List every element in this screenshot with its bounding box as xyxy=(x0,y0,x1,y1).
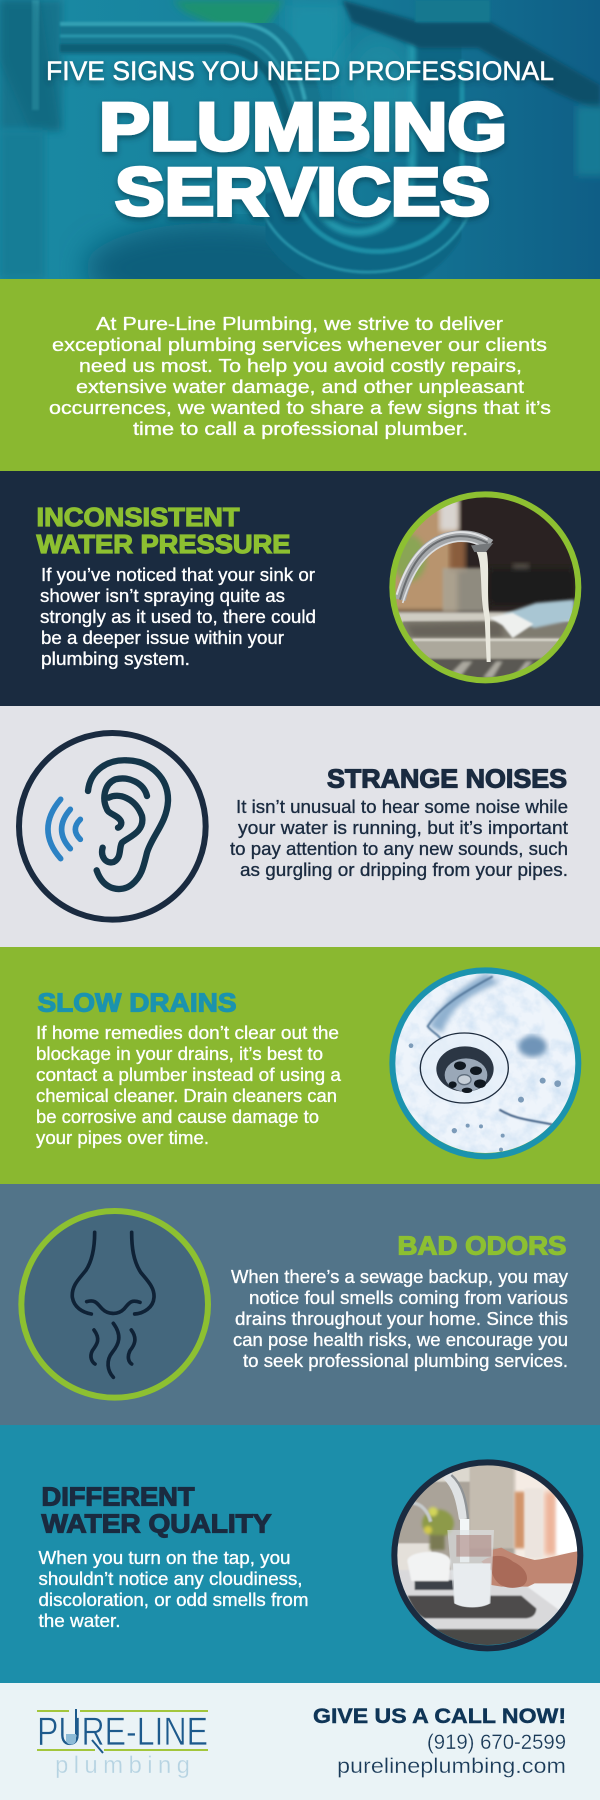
icon: ear with sound waves xyxy=(19,733,206,920)
hero background photo: pipes xyxy=(0,0,600,279)
heading: WATER QUALITY xyxy=(42,1508,272,1538)
photo: sink drain xyxy=(386,963,586,1163)
photo: filling a glass xyxy=(388,1455,588,1655)
hero title: PLUMBING xyxy=(99,89,507,165)
heading: INCONSISTENT xyxy=(36,502,240,532)
body text xyxy=(36,1022,342,1148)
body text: shouldn’t notice any cloudiness, xyxy=(38,1568,302,1589)
body text: drains throughout your home. Since this xyxy=(235,1308,568,1329)
body text: be corrosive and cause damage to xyxy=(36,1106,319,1127)
body text: chemical cleaner. Drain cleaners can xyxy=(36,1085,337,1106)
logo: Pure-Line Plumbing: plumbing xyxy=(55,1752,190,1779)
body text: the water. xyxy=(38,1610,120,1631)
intro text xyxy=(49,313,551,439)
body text: If home remedies don’t clear out the xyxy=(36,1022,339,1043)
body text: strongly as it used to, there could xyxy=(40,606,316,627)
body text: as gurgling or dripping from your pipes. xyxy=(240,859,568,880)
hero title: SERVICES xyxy=(115,154,490,230)
heading: BAD ODORS xyxy=(398,1230,566,1260)
body text: plumbing system. xyxy=(41,648,190,669)
hero title xyxy=(99,89,507,230)
body text xyxy=(230,796,568,880)
heading: STRANGE NOISES xyxy=(327,764,567,794)
website: purelineplumbing.com xyxy=(337,1755,566,1778)
panel: inconsistent water pressure xyxy=(0,471,600,706)
body text: blockage in your drains, it’s best to xyxy=(36,1043,323,1064)
hero kicker line: FIVE SIGNS YOU NEED PROFESSIONAL xyxy=(46,56,554,86)
panel: bad odors xyxy=(0,1184,600,1425)
body text: be a deeper issue within your xyxy=(41,627,284,648)
body text: contact a plumber instead of using a xyxy=(36,1064,342,1085)
logo: Pure-Line Plumbing: PURE-LINE xyxy=(37,1710,208,1754)
body text: It isn’t unusual to hear some noise while xyxy=(236,796,568,817)
footer xyxy=(0,1683,600,1800)
panel: hero header xyxy=(0,0,600,279)
photo: running faucet xyxy=(386,488,586,688)
logo: Pure-Line Plumbing xyxy=(37,1709,208,1779)
body text: When there’s a sewage backup, you may xyxy=(231,1266,569,1287)
body text: your water is running, but it’s important xyxy=(238,817,568,838)
body text: to pay attention to any new sounds, such xyxy=(230,838,568,859)
intro text: need us most. To help you avoid costly repairs, xyxy=(79,355,522,376)
intro text: exceptional plumbing services whenever our clients xyxy=(52,334,547,355)
panel: intro xyxy=(0,279,600,471)
phone number: (919) 670-2599 xyxy=(427,1731,566,1754)
intro text: occurrences, we wanted to share a few signs that it’s xyxy=(49,397,551,418)
heading xyxy=(36,502,290,559)
heading: WATER PRESSURE xyxy=(36,529,290,559)
heading: DIFFERENT xyxy=(42,1482,195,1512)
body text: When you turn on the tap, you xyxy=(38,1547,290,1568)
body text: notice foul smells coming from various xyxy=(249,1287,568,1308)
icon: nose with smell xyxy=(21,1211,208,1398)
heading: SLOW DRAINS xyxy=(38,988,237,1018)
call to action: GIVE US A CALL NOW! xyxy=(313,1704,566,1728)
heading xyxy=(42,1482,272,1538)
body text: discoloration, or odd smells from xyxy=(38,1589,308,1610)
body text: can pose health risks, we encourage you xyxy=(233,1329,568,1350)
body text xyxy=(38,1547,308,1631)
body text: shower isn’t spraying quite as xyxy=(40,585,285,606)
panel: slow drains xyxy=(0,947,600,1184)
body text: to seek professional plumbing services. xyxy=(243,1350,568,1371)
body text xyxy=(231,1266,569,1371)
intro text: extensive water damage, and other unpleasant xyxy=(76,376,524,397)
body text: your pipes over time. xyxy=(36,1127,209,1148)
body text xyxy=(40,564,316,669)
intro text: time to call a professional plumber. xyxy=(133,418,468,439)
body text: If you’ve noticed that your sink or xyxy=(41,564,315,585)
panel: different water quality xyxy=(0,1425,600,1683)
panel: strange noises xyxy=(0,706,600,947)
intro text: At Pure-Line Plumbing, we strive to deliver xyxy=(96,313,503,334)
